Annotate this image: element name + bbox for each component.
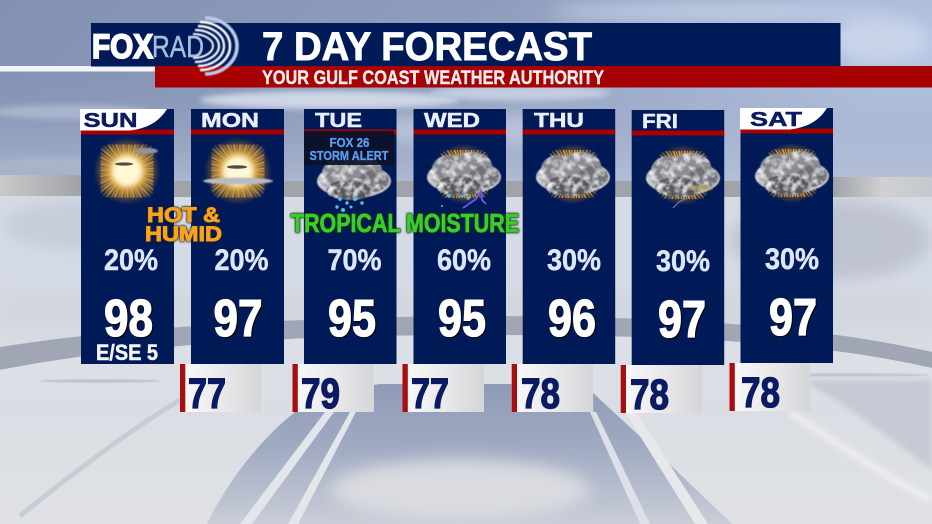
low temperature: Saturday bbox=[730, 363, 810, 417]
logo: FOX RAD: RAD bbox=[152, 29, 204, 64]
logo: FOX RAD: FOX bbox=[92, 28, 153, 66]
icon: sun behind cloud bbox=[536, 143, 610, 205]
precipitation chance: 20% bbox=[214, 244, 268, 277]
day label: MON bbox=[201, 110, 259, 132]
panel: Thursday bbox=[523, 109, 615, 364]
precipitation chance: 30% bbox=[547, 244, 601, 277]
low temperature: Friday: 78 bbox=[630, 371, 669, 419]
panel: Monday bbox=[191, 109, 284, 364]
low temperature: Tuesday: 79 bbox=[301, 370, 340, 418]
high temperature: 98 bbox=[104, 290, 153, 348]
icon: sun behind cloud with lightning bbox=[646, 144, 720, 208]
low temperature: Thursday bbox=[512, 364, 593, 418]
high temperature: 95 bbox=[438, 290, 486, 348]
low temperature: Wednesday bbox=[402, 364, 484, 418]
high temperature: 97 bbox=[769, 289, 817, 347]
subtitle: YOUR GULF COAST WEATHER AUTHORITY bbox=[262, 68, 604, 89]
high temperature: 97 bbox=[658, 291, 706, 349]
icon: sun behind storm cloud with lightning bbox=[427, 143, 501, 208]
panel: Tuesday bbox=[304, 109, 396, 364]
day label flag bbox=[80, 109, 167, 130]
storm alert badge: FOX 26 bbox=[330, 135, 370, 150]
day label flag bbox=[740, 108, 827, 130]
day label: TUE bbox=[315, 110, 362, 132]
icon: sun with clouds bbox=[203, 137, 273, 205]
panel: Saturday bbox=[740, 108, 833, 363]
high temperature: 96 bbox=[548, 290, 596, 348]
storm alert badge bbox=[304, 131, 394, 165]
precipitation chance: 20% bbox=[104, 244, 158, 277]
callout: tropical moisture: TROPICAL MOISTURE bbox=[291, 208, 519, 238]
panel: Sunday bbox=[80, 109, 174, 365]
high temperature: 97 bbox=[214, 290, 262, 348]
high temperature: 95 bbox=[328, 290, 376, 348]
day label: SAT bbox=[750, 109, 802, 131]
low temperature: Thursday: 78 bbox=[521, 370, 560, 418]
low temperature: Friday bbox=[621, 365, 702, 419]
header banner bbox=[91, 23, 932, 89]
day label: THU bbox=[534, 110, 584, 132]
wind: E/SE 5 bbox=[96, 340, 158, 365]
white rule left of banner bbox=[0, 66, 156, 72]
panel: Wednesday bbox=[414, 109, 506, 364]
callout: hot and humid bbox=[145, 204, 222, 246]
low temperature: Wednesday: 77 bbox=[411, 370, 449, 418]
low temperature: Tuesday bbox=[292, 364, 374, 418]
precipitation chance: 70% bbox=[328, 244, 382, 277]
low temperature: Monday bbox=[180, 364, 261, 418]
precipitation chance: 60% bbox=[437, 244, 491, 277]
precipitation chance: 30% bbox=[656, 245, 710, 278]
day label: WED bbox=[424, 110, 480, 132]
icon: sun behind cloud bbox=[755, 142, 829, 204]
day label: SUN bbox=[84, 110, 138, 132]
callout: hot and humid: HOT & bbox=[147, 204, 220, 227]
title: 7 DAY FORECAST bbox=[262, 25, 592, 69]
storm alert badge: STORM ALERT bbox=[310, 148, 389, 163]
logo: FOX RAD bbox=[92, 18, 237, 74]
icon: sun with small clouds bbox=[93, 137, 161, 205]
callout: hot and humid: HUMID bbox=[145, 223, 222, 246]
panel: Friday bbox=[632, 110, 724, 365]
day label: FRI bbox=[642, 111, 678, 133]
low temperature: Monday: 77 bbox=[188, 370, 226, 418]
precipitation chance: 30% bbox=[765, 243, 819, 276]
low temperature: Saturday: 78 bbox=[741, 369, 780, 417]
icon: rain cloud bbox=[317, 156, 391, 212]
